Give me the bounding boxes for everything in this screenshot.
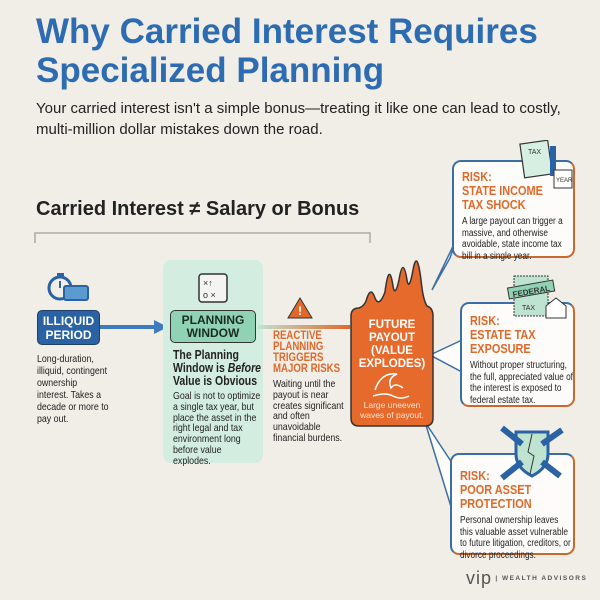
risk: poor asset protection: RISK: <box>460 468 490 483</box>
text: reactive planning heading: REACTIVE PLANNING TRIGGERS MAJOR RISKS <box>273 330 340 375</box>
icon: strategy board <box>198 273 228 303</box>
icon: federal tax stamp: TAX <box>522 305 535 312</box>
icon: strategy board: o × <box>203 290 216 300</box>
arrow: illiquid to planning <box>100 320 163 334</box>
risk: estate tax exposure: Without proper structuring, the full, appreciated value of the interest is exposed to federal estate tax. <box>470 360 573 406</box>
shape: future payout: (VALUE <box>371 345 413 357</box>
text: planning heading: The Planning Window is Before Value is Obvious <box>173 348 261 388</box>
risk: state income tax shock: STATE INCOME <box>462 183 543 198</box>
box: illiquid period <box>37 310 100 345</box>
box: illiquid period: ILLIQUID <box>43 314 94 328</box>
box: planning window label: PLANNING <box>182 313 244 327</box>
logo: vip | WEALTH ADVISORS <box>466 568 587 588</box>
risk: state income tax shock: TAX SHOCK <box>462 197 526 212</box>
panel: planning window <box>163 260 263 463</box>
risk: estate tax exposure: ESTATE TAX <box>470 327 536 342</box>
shape: future payout: Large uneeven <box>364 400 421 410</box>
shape: future payout: FUTURE <box>369 319 416 331</box>
risk: state income tax shock <box>452 160 575 258</box>
risk: poor asset protection <box>450 453 575 555</box>
risk: estate tax exposure <box>460 302 575 407</box>
title: Why Carried Interest Requires Specialized Planning <box>36 12 538 90</box>
box: illiquid period: PERIOD <box>45 328 92 342</box>
shape: future payout: waves of payout. <box>359 410 424 420</box>
risk: estate tax exposure: RISK: <box>470 313 500 328</box>
icon: strategy board: ×↑ <box>203 278 213 288</box>
risk: poor asset protection: PROTECTION <box>460 496 532 511</box>
box: planning window label <box>170 310 256 343</box>
connector line <box>258 325 350 329</box>
icon: tax document <box>519 140 573 188</box>
icon: clock and money <box>48 273 89 301</box>
shape: future payout <box>350 260 434 427</box>
section heading: Carried Interest ≠ Salary or Bonus <box>36 198 359 220</box>
risk: state income tax shock: A large payout can trigger a massive, and otherwise avoidable, state income tax bill in a single year. <box>462 216 563 262</box>
risk: poor asset protection: Personal ownership leaves this valuable asset vulnerable to future litigation, creditors, or divorce proceedings. <box>460 515 571 560</box>
text: illiquid description: Long-duration, illiquid, contingent ownership interest. Takes a decade or more to pay out. <box>37 353 109 425</box>
icon: federal tax stamp: FEDERAL <box>512 284 551 299</box>
icon: warning: ! <box>298 304 302 318</box>
text: reactive body: Waiting until the payout is near creates significant and often unavoidable financial burdens. <box>273 378 344 444</box>
risk: poor asset protection: POOR ASSET <box>460 482 531 497</box>
icon: tax document: YEAR <box>556 178 573 184</box>
icon: federal tax stamp <box>506 276 566 318</box>
risk: estate tax exposure: EXPOSURE <box>470 341 531 356</box>
icon: tax document: TAX <box>528 149 541 156</box>
text: planning body: Goal is not to optimize a single tax year, but place the asset in the right legal and tax environment long before value explodes. <box>173 390 260 467</box>
icon: warning <box>287 297 313 318</box>
subtitle: Your carried interest isn't a simple bonus—treating it like one can lead to costly, multi-million dollar mistakes down the road. <box>36 100 561 138</box>
box: planning window label: WINDOW <box>187 326 239 340</box>
bracket <box>34 232 371 243</box>
risk: state income tax shock: RISK: <box>462 169 492 184</box>
shape: future payout: EXPLODES) <box>359 358 425 370</box>
shape: future payout: PAYOUT <box>369 332 415 344</box>
icon: shield with arrows <box>500 426 564 480</box>
